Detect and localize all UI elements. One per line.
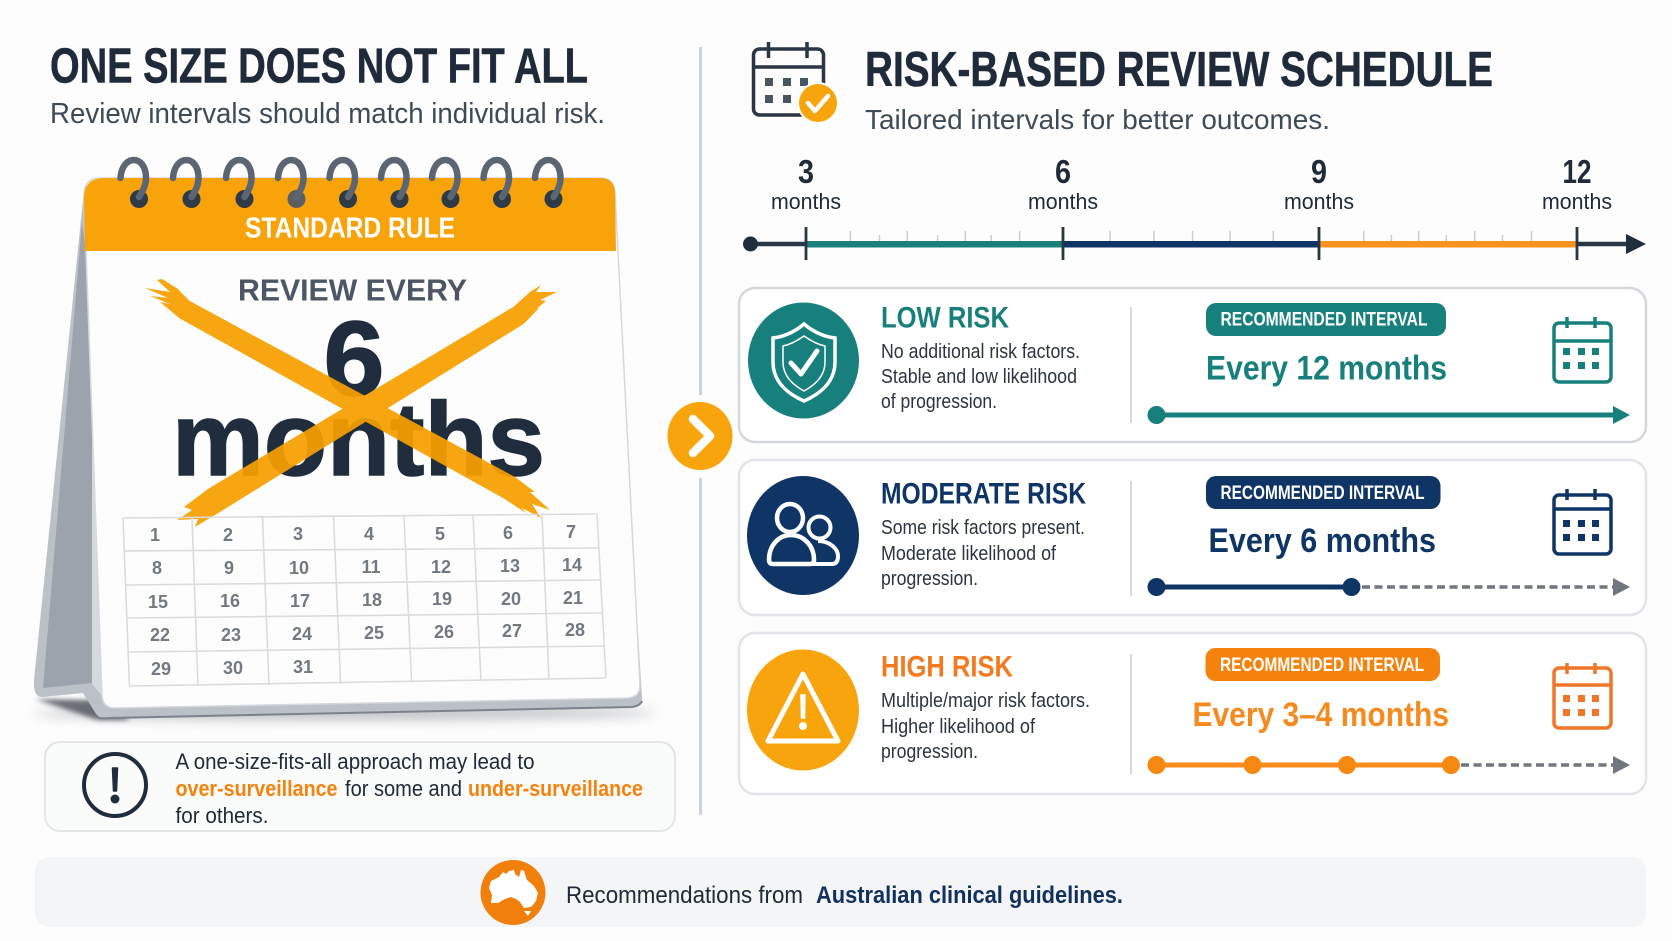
date numbers: 5 <box>435 524 445 544</box>
spiral binding rings <box>120 160 562 208</box>
description <box>881 690 1090 763</box>
card: high risk <box>739 633 1646 794</box>
card: low risk <box>739 288 1646 442</box>
title: RISK-BASED REVIEW SCHEDULE <box>865 43 1493 97</box>
date numbers: 14 <box>562 555 582 575</box>
date numbers: 16 <box>220 591 240 611</box>
interval: Every 3–4 months <box>1192 696 1449 734</box>
date numbers: 7 <box>566 522 576 542</box>
badge <box>1206 476 1440 509</box>
date numbers: 26 <box>434 622 454 642</box>
interval track <box>1148 406 1630 424</box>
date numbers: 8 <box>152 558 162 578</box>
header label: STANDARD RULE <box>245 212 455 244</box>
interval: Every 12 months <box>1206 350 1447 388</box>
date numbers: 31 <box>293 657 313 677</box>
description: Some risk factors present. <box>881 517 1085 539</box>
description <box>881 517 1085 590</box>
badge <box>1206 303 1446 336</box>
label: review every: REVIEW EVERY <box>238 272 467 308</box>
interval track <box>1148 756 1630 774</box>
description: Higher likelihood of <box>881 716 1035 738</box>
badge: RECOMMENDED INTERVAL <box>1220 655 1424 676</box>
crossed out number: 6 <box>324 300 384 418</box>
description: of progression. <box>881 391 997 413</box>
date numbers: 11 <box>361 557 381 577</box>
date numbers: 12 <box>431 557 451 577</box>
callout text <box>176 749 643 828</box>
date numbers: 10 <box>289 558 309 578</box>
description: Moderate likelihood of <box>881 543 1056 565</box>
date numbers: 25 <box>364 623 384 643</box>
timeline labels: months <box>1028 189 1098 214</box>
date numbers: 27 <box>502 621 522 641</box>
icon: map of Australia <box>480 860 546 925</box>
timeline labels: months <box>1284 189 1354 214</box>
callout: over and under surveillance <box>45 742 675 831</box>
orange cross-out <box>145 279 557 527</box>
description: Multiple/major risk factors. <box>881 690 1090 712</box>
footer text: Australian clinical guidelines. <box>816 882 1123 909</box>
date numbers: 29 <box>151 659 171 679</box>
icon: calendar <box>1554 317 1611 382</box>
title: ONE SIZE DOES NOT FIT ALL <box>50 40 588 94</box>
timeline labels: 9 <box>1311 153 1327 190</box>
badge: RECOMMENDED INTERVAL <box>1220 310 1428 330</box>
timeline labels: months <box>771 189 841 214</box>
description: No additional risk factors. <box>881 341 1080 363</box>
date numbers: 9 <box>224 558 234 578</box>
date numbers: 30 <box>223 658 243 678</box>
interval track <box>1148 578 1630 596</box>
timeline labels: 12 <box>1562 153 1592 190</box>
description <box>881 341 1080 413</box>
icon: shield <box>748 302 859 418</box>
date numbers: 22 <box>150 625 170 645</box>
interval: Every 6 months <box>1208 522 1436 560</box>
description: Stable and low likelihood <box>881 366 1077 388</box>
date numbers: 13 <box>500 556 520 576</box>
icon: calendar <box>1554 663 1611 728</box>
subtitle: Review intervals should match individual risk. <box>50 98 605 130</box>
heading: HIGH RISK <box>881 650 1013 684</box>
icon: arrow between panels <box>668 402 732 470</box>
date numbers: 18 <box>362 590 382 610</box>
panel: risk-based review schedule <box>739 42 1646 794</box>
footer: source of recommendations <box>35 857 1646 927</box>
desk calendar illustration <box>34 160 655 720</box>
heading: MODERATE RISK <box>881 478 1086 510</box>
date numbers: 19 <box>432 589 452 609</box>
badge: RECOMMENDED INTERVAL <box>1220 483 1425 504</box>
date numbers: 6 <box>503 523 513 543</box>
date numbers: 20 <box>501 589 521 609</box>
badge <box>1206 648 1440 681</box>
description: progression. <box>881 741 978 763</box>
orange header band <box>84 178 616 251</box>
timeline labels: 6 <box>1055 153 1071 190</box>
date numbers: 1 <box>150 525 160 545</box>
icon: exclamation <box>84 754 146 816</box>
date numbers: 17 <box>290 591 310 611</box>
timeline labels: 3 <box>798 153 814 190</box>
footer text <box>566 882 1123 909</box>
callout text: under-surveillance <box>468 776 643 801</box>
timeline axis <box>743 227 1646 260</box>
callout text: over-surveillance <box>176 776 338 801</box>
date numbers: 21 <box>563 588 583 608</box>
icon: calendar with check <box>754 42 839 124</box>
date grid <box>123 514 606 686</box>
icon: warning triangle <box>747 650 859 770</box>
date numbers: 28 <box>565 620 585 640</box>
timeline <box>743 153 1646 260</box>
icon: people <box>747 476 859 595</box>
timeline labels <box>771 153 1612 214</box>
date numbers: 15 <box>148 592 168 612</box>
icon: calendar <box>1554 489 1611 554</box>
crossed out unit: months <box>172 382 545 498</box>
callout text: A one-size-fits-all approach may lead to <box>176 749 534 774</box>
subtitle: Tailored intervals for better outcomes. <box>865 104 1330 135</box>
callout text: for others. <box>176 803 268 828</box>
footer text: Recommendations from <box>566 882 803 909</box>
callout text: for some and <box>345 776 462 801</box>
description: progression. <box>881 568 978 590</box>
card: moderate risk <box>739 460 1646 615</box>
heading: LOW RISK <box>881 302 1009 334</box>
date numbers: 4 <box>364 524 374 544</box>
date numbers <box>148 522 585 679</box>
timeline labels: months <box>1542 189 1612 214</box>
panel: one size does not fit all <box>34 40 675 831</box>
date numbers: 3 <box>293 524 303 544</box>
date numbers: 2 <box>223 525 233 545</box>
date numbers: 23 <box>221 625 241 645</box>
date numbers: 24 <box>292 624 312 644</box>
